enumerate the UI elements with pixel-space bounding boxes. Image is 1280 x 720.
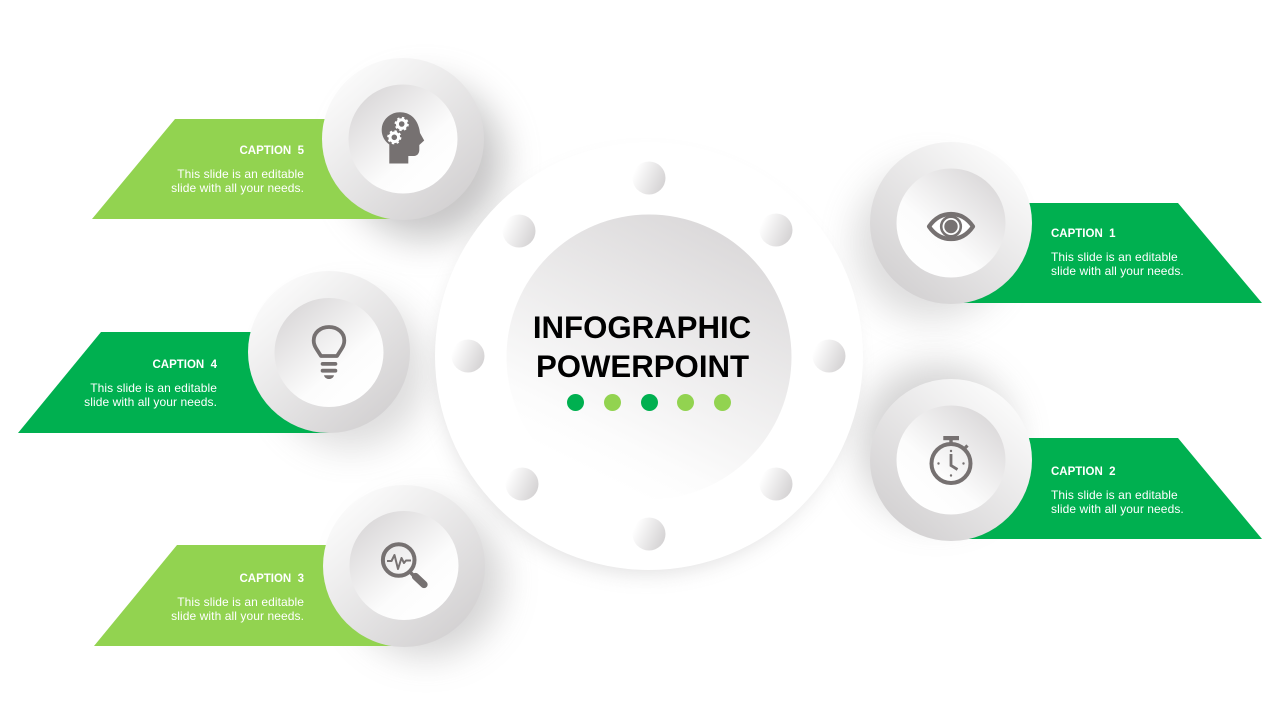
panel: caption 2 banner [951, 438, 1262, 539]
text block: caption 2: This slide is an editable [1051, 488, 1178, 502]
central hub disc [435, 142, 863, 574]
panel: caption 5 banner [92, 119, 403, 219]
icon: light bulb [314, 327, 344, 379]
text block: caption 2: slide with all your needs. [1051, 502, 1184, 516]
central inner circle [506, 214, 792, 500]
circle: caption 5 [322, 58, 484, 220]
panel: caption 1 banner [951, 203, 1262, 303]
title: INFOGRAPHIC [533, 310, 751, 345]
text block: caption 3: slide with all your needs. [171, 609, 304, 623]
hub satellite dots [452, 162, 846, 550]
panel: caption 4 banner [18, 332, 329, 433]
icon: stopwatch [932, 436, 970, 483]
text block: caption 4: slide with all your needs. [84, 395, 217, 409]
text block: caption 4: CAPTION 4 [152, 359, 218, 371]
text block: caption 2: CAPTION 2 [1051, 466, 1116, 478]
text block: caption 5: This slide is an editable [177, 167, 304, 181]
circle: caption 1 [870, 142, 1032, 304]
text block: caption 1: This slide is an editable [1051, 250, 1178, 264]
circle: caption 4 [248, 271, 410, 433]
circle: caption 3 [323, 485, 485, 647]
title [533, 310, 751, 384]
icon: eye [929, 214, 973, 239]
panel: caption 3 banner [94, 545, 404, 646]
icon: magnifier with pulse [383, 544, 424, 584]
text block: caption 4 [84, 359, 218, 409]
text block: caption 3 [171, 573, 304, 623]
text block: caption 4: This slide is an editable [90, 381, 217, 395]
text block: caption 5 [171, 145, 305, 195]
text block: caption 3: This slide is an editable [177, 595, 304, 609]
soft shadows behind the circles [275, 83, 1014, 656]
text block: caption 1: slide with all your needs. [1051, 264, 1184, 278]
text block: caption 5: slide with all your needs. [171, 181, 304, 195]
icon: head with gears [382, 112, 424, 164]
text block: caption 1 [1051, 228, 1184, 278]
text block: caption 5: CAPTION 5 [239, 145, 305, 157]
title accent dots [567, 394, 731, 411]
text block: caption 3: CAPTION 3 [239, 573, 304, 585]
text block: caption 2 [1051, 466, 1184, 516]
text block: caption 1: CAPTION 1 [1051, 228, 1116, 240]
circle: caption 2 [870, 379, 1032, 541]
title: POWERPOINT [536, 349, 749, 384]
